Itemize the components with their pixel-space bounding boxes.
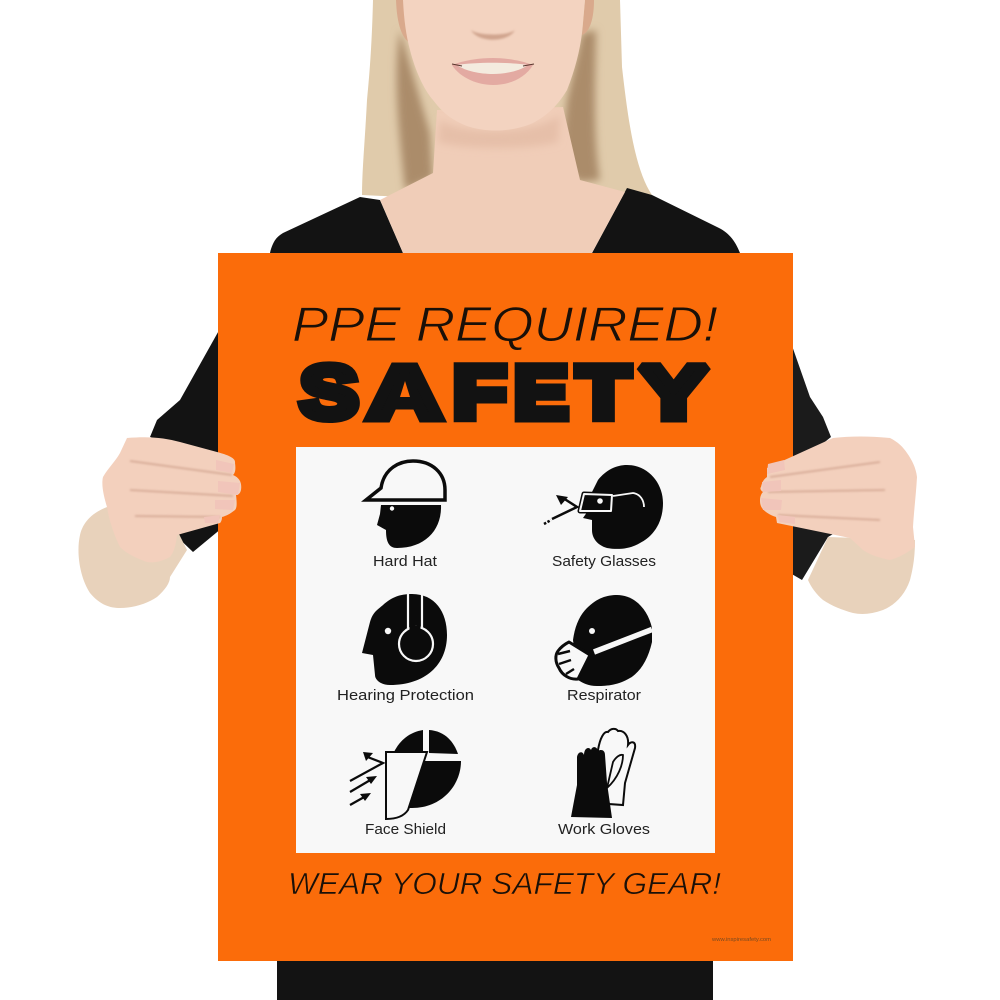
poster: [218, 253, 793, 961]
poster background: [218, 253, 793, 961]
nose shadow: [471, 30, 515, 40]
inner hair shadow: [397, 30, 600, 190]
left sleeve lower: [170, 505, 222, 552]
label: safety glasses: Safety Glasses: [552, 554, 656, 570]
shirt lower: [277, 950, 713, 1000]
website credit: www.inspiresafety.com: [712, 937, 771, 943]
heading: safety: F: [453, 352, 506, 435]
heading: safety: T: [577, 351, 630, 434]
right sleeve upper: [790, 340, 831, 470]
mouth: [452, 58, 533, 85]
heading: safety: Y: [640, 351, 707, 434]
right sleeve lower: [790, 510, 840, 580]
right nails: [761, 460, 795, 524]
right finger creases: [768, 462, 885, 520]
label: hearing protection: Hearing Protection: [337, 688, 474, 704]
person: woman behind poster: [150, 0, 840, 1000]
neck shadow: [438, 115, 560, 148]
heading: safety: A: [368, 351, 441, 434]
icon: face shield: [350, 730, 461, 819]
left forearm: [78, 507, 187, 608]
ears: [396, 0, 594, 43]
icon: respirator: [556, 595, 652, 686]
neck and chest: [380, 107, 625, 253]
heading: safety: E: [514, 352, 568, 434]
icon: hearing protection: [362, 593, 447, 685]
heading: safety: [300, 351, 707, 435]
heading: safety: S: [300, 352, 358, 435]
panel: PPE icons: [296, 447, 715, 853]
left hand: [102, 437, 241, 562]
heading: PPE required: PPE REQUIRED!: [292, 298, 718, 352]
label: respirator: Respirator: [567, 688, 641, 704]
left nails: [204, 460, 240, 523]
hair: [362, 0, 652, 197]
label: work gloves: Work Gloves: [558, 822, 650, 838]
shirt upper: [270, 188, 745, 270]
icon: work gloves: [571, 729, 635, 818]
icon: safety glasses: [544, 465, 663, 549]
left sleeve upper: [150, 325, 222, 462]
right forearm: [808, 537, 915, 614]
left finger creases: [130, 461, 233, 517]
icon: hard hat: [366, 461, 445, 548]
left arm and hand: [78, 436, 917, 614]
right hand: [760, 436, 917, 560]
label: hard hat: Hard Hat: [373, 554, 437, 570]
face: [403, 0, 585, 130]
panel background: [296, 447, 715, 853]
footer slogan: WEAR YOUR SAFETY GEAR!: [288, 866, 721, 901]
label: face shield: Face Shield: [365, 822, 446, 838]
